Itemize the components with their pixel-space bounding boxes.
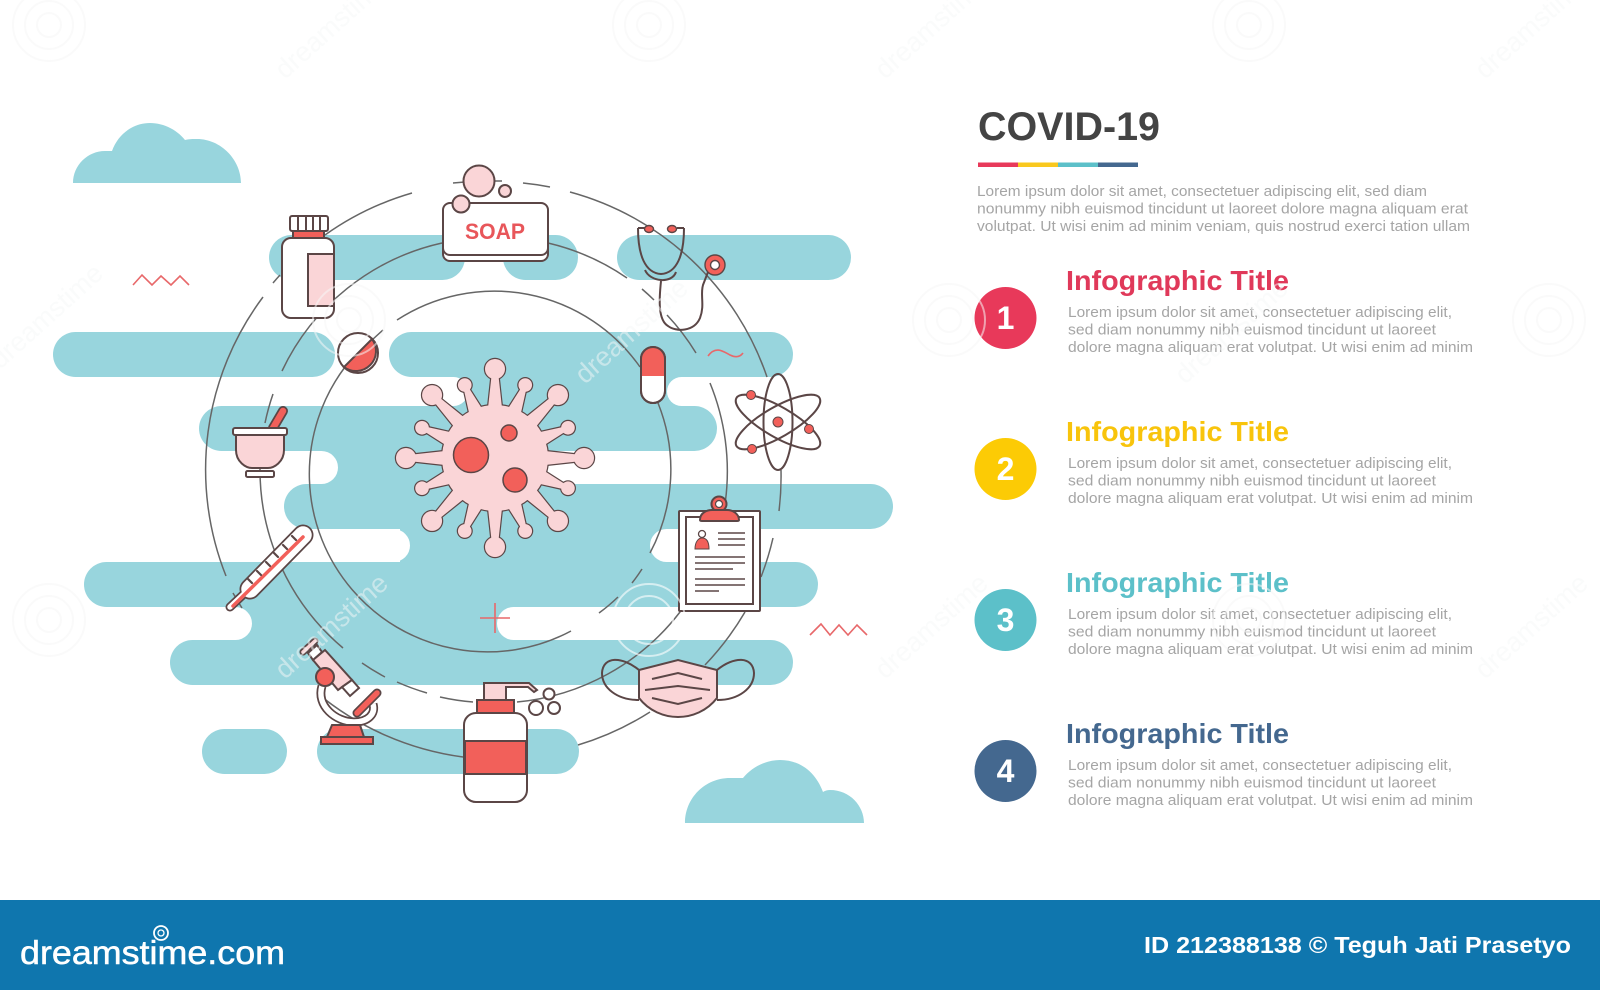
footer bar bbox=[0, 900, 1600, 990]
list item 4 bbox=[974, 718, 1473, 809]
list item 2: sed diam nonummy nibh euismod tincidunt ut laoreet bbox=[1068, 474, 1436, 490]
list item 3: sed diam nonummy nibh euismod tincidunt ut laoreet bbox=[1068, 624, 1436, 640]
list item 2: 2 bbox=[997, 451, 1014, 487]
footer credit: ID 212388138 © Teguh Jati Prasetyo bbox=[1144, 932, 1571, 958]
list item 2: Infographic Title bbox=[1066, 416, 1289, 447]
watermark text: dreamstime bbox=[1469, 568, 1594, 684]
zigzag left bbox=[133, 275, 189, 285]
list item 3: 3 bbox=[997, 602, 1014, 638]
cloud bottom right bbox=[685, 760, 864, 823]
icon: half red pill bbox=[338, 333, 378, 373]
list item 1: dolore magna aliquam erat volutpat. Ut wisi enim ad minim bbox=[1068, 340, 1473, 356]
icon: clipboard bbox=[679, 496, 760, 611]
watermark text: dreamstime bbox=[1169, 273, 1294, 389]
icon: atom bbox=[729, 374, 827, 470]
icon: sanitizer pump bottle bbox=[464, 683, 560, 802]
title: COVID-19 bbox=[978, 105, 1160, 149]
icon: medicine bottle bbox=[282, 216, 334, 318]
icon: thermometer bbox=[230, 535, 303, 607]
list item 3: dolore magna aliquam erat volutpat. Ut wisi enim ad minim bbox=[1068, 642, 1473, 658]
title colour underline bbox=[978, 162, 1138, 167]
wave bbox=[708, 350, 743, 357]
icon: mortar and pestle bbox=[233, 411, 287, 477]
list item 2: dolore magna aliquam erat volutpat. Ut wisi enim ad minim bbox=[1068, 491, 1473, 507]
cloud top left bbox=[73, 123, 241, 183]
list item 4: Infographic Title bbox=[1066, 718, 1289, 749]
list item 4: Lorem ipsum dolor sit amet, consectetuer adipiscing elit, bbox=[1068, 758, 1452, 774]
icon: capsule bbox=[641, 347, 665, 403]
icon: stethoscope bbox=[638, 226, 725, 330]
watermark text: dreamstime bbox=[269, 568, 394, 684]
list item 4: 4 bbox=[997, 753, 1015, 789]
icon: soap bar bbox=[443, 166, 548, 261]
icon: microscope bbox=[303, 641, 377, 744]
list item 1: Lorem ipsum dolor sit amet, consectetuer adipiscing elit, bbox=[1068, 305, 1452, 321]
list item 4: sed diam nonummy nibh euismod tincidunt ut laoreet bbox=[1068, 776, 1436, 792]
watermark text: dreamstime bbox=[869, 568, 994, 684]
watermark text bbox=[0, 0, 1594, 684]
watermark text: dreamstime bbox=[569, 273, 694, 389]
icon: virus bbox=[396, 359, 594, 557]
icon: soap bar: SOAP bbox=[465, 219, 525, 244]
intro text block: volutpat. Ut wisi enim ad minim veniam, quis nostrud exerci tation ullam bbox=[977, 219, 1470, 235]
intro text block: Lorem ipsum dolor sit amet, consectetuer adipiscing elit, sed diam bbox=[977, 184, 1427, 200]
intro text block: nonummy nibh euismod tincidunt ut laoreet dolore magna aliquam erat bbox=[977, 202, 1468, 218]
icon: face mask bbox=[602, 660, 754, 717]
intro text block bbox=[977, 184, 1470, 235]
list item 3: Infographic Title bbox=[1066, 567, 1289, 598]
list item 1: sed diam nonummy nibh euismod tincidunt ut laoreet bbox=[1068, 322, 1436, 338]
list item 2 bbox=[974, 416, 1473, 507]
concentric ring arcs bbox=[206, 181, 781, 757]
list item 1: 1 bbox=[997, 300, 1014, 336]
plus sign bbox=[480, 603, 510, 633]
footer logo: dreamstime.com bbox=[20, 934, 285, 971]
list item 1: Infographic Title bbox=[1066, 265, 1289, 296]
list item 1 bbox=[974, 265, 1473, 356]
background: teal bars bbox=[0, 235, 1050, 774]
list item 3 bbox=[974, 567, 1473, 658]
list item 4: dolore magna aliquam erat volutpat. Ut wisi enim ad minim bbox=[1068, 793, 1473, 809]
list item 2: Lorem ipsum dolor sit amet, consectetuer adipiscing elit, bbox=[1068, 456, 1452, 472]
zigzag right bbox=[810, 624, 867, 635]
list item 3: Lorem ipsum dolor sit amet, consectetuer adipiscing elit, bbox=[1068, 607, 1452, 623]
watermark overlay bbox=[13, 0, 1585, 656]
